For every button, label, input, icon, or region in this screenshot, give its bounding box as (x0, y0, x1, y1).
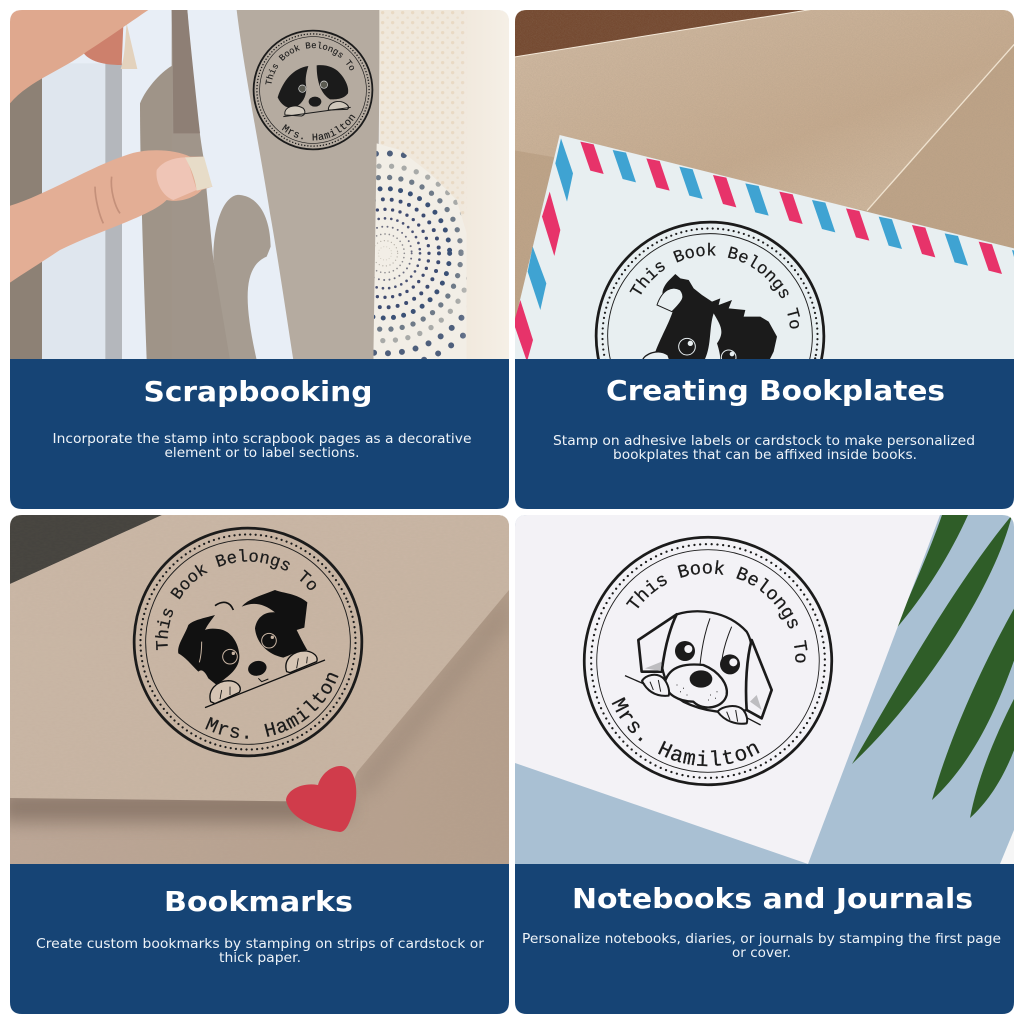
icon: peeking beagle (625, 611, 772, 725)
heading: Creating Bookplates (606, 374, 945, 407)
stamp: beagle with curved text (582, 536, 834, 786)
stamp: beagle with curved text: This Book Belongs To (626, 560, 808, 663)
description: element or to label sections. (164, 446, 360, 461)
description: or cover. (732, 946, 791, 961)
stamp: collie with curved text (252, 30, 374, 150)
description: bookplates that can be affixed inside books. (613, 448, 917, 463)
description (36, 937, 485, 966)
title bar: bookmarks (10, 864, 509, 1014)
photo: white paper on blue with green leaves (515, 515, 1016, 864)
photo: fingers turning a stamped scrapbook page (10, 10, 509, 359)
stamp: collie with curved text (132, 526, 364, 758)
description: Stamp on adhesive labels or cardstock to make personalized (553, 434, 975, 449)
stamp: collie with curved text: Mrs. Hamilton (282, 114, 356, 140)
photo: kraft envelope with heart sticker (0, 515, 509, 864)
icon: upper finger (7, 7, 148, 103)
icon: lower finger (7, 150, 212, 285)
panel: creating bookplates (515, 10, 1014, 509)
icon: peeking collie (642, 274, 777, 365)
title bar: notebooks and journals (515, 864, 1014, 1014)
icon: peeking collie (178, 590, 325, 708)
description (522, 932, 1001, 961)
heading: Notebooks and Journals (572, 882, 973, 915)
description (553, 434, 975, 463)
heading: Bookmarks (164, 885, 353, 918)
airmail card (512, 135, 1022, 362)
stamp: collie with curved text (594, 220, 826, 359)
title bar: creating bookplates (515, 359, 1014, 509)
description: Incorporate the stamp into scrapbook pages as a decorative (52, 432, 472, 447)
panel: bookmarks (10, 515, 509, 864)
stamp: collie with curved text: This Book Belongs To (630, 242, 800, 329)
stamp: collie with curved text: This Book Belongs To (154, 549, 316, 650)
description: Create custom bookmarks by stamping on strips of cardstock or (36, 937, 485, 952)
photo: kraft envelope with airmail card (515, 10, 1014, 359)
icon: heart sticker (286, 766, 356, 832)
stamp: beagle with curved text: Mrs. Hamilton (612, 697, 760, 766)
description: thick paper. (219, 951, 301, 966)
icon: peeking collie (278, 65, 351, 117)
panel: scrapbooking (10, 10, 509, 509)
heading: Scrapbooking (144, 375, 372, 408)
icon: leaves (852, 515, 1016, 818)
title bar: scrapbooking (10, 359, 509, 509)
description: Personalize notebooks, diaries, or journals by stamping the first page (522, 932, 1001, 947)
stamp: collie with curved text: This Book Belongs To (265, 42, 354, 84)
panel: notebooks and journals (515, 515, 1014, 864)
description (52, 432, 472, 461)
stamp: collie with curved text: Mrs. Hamilton (205, 672, 338, 739)
